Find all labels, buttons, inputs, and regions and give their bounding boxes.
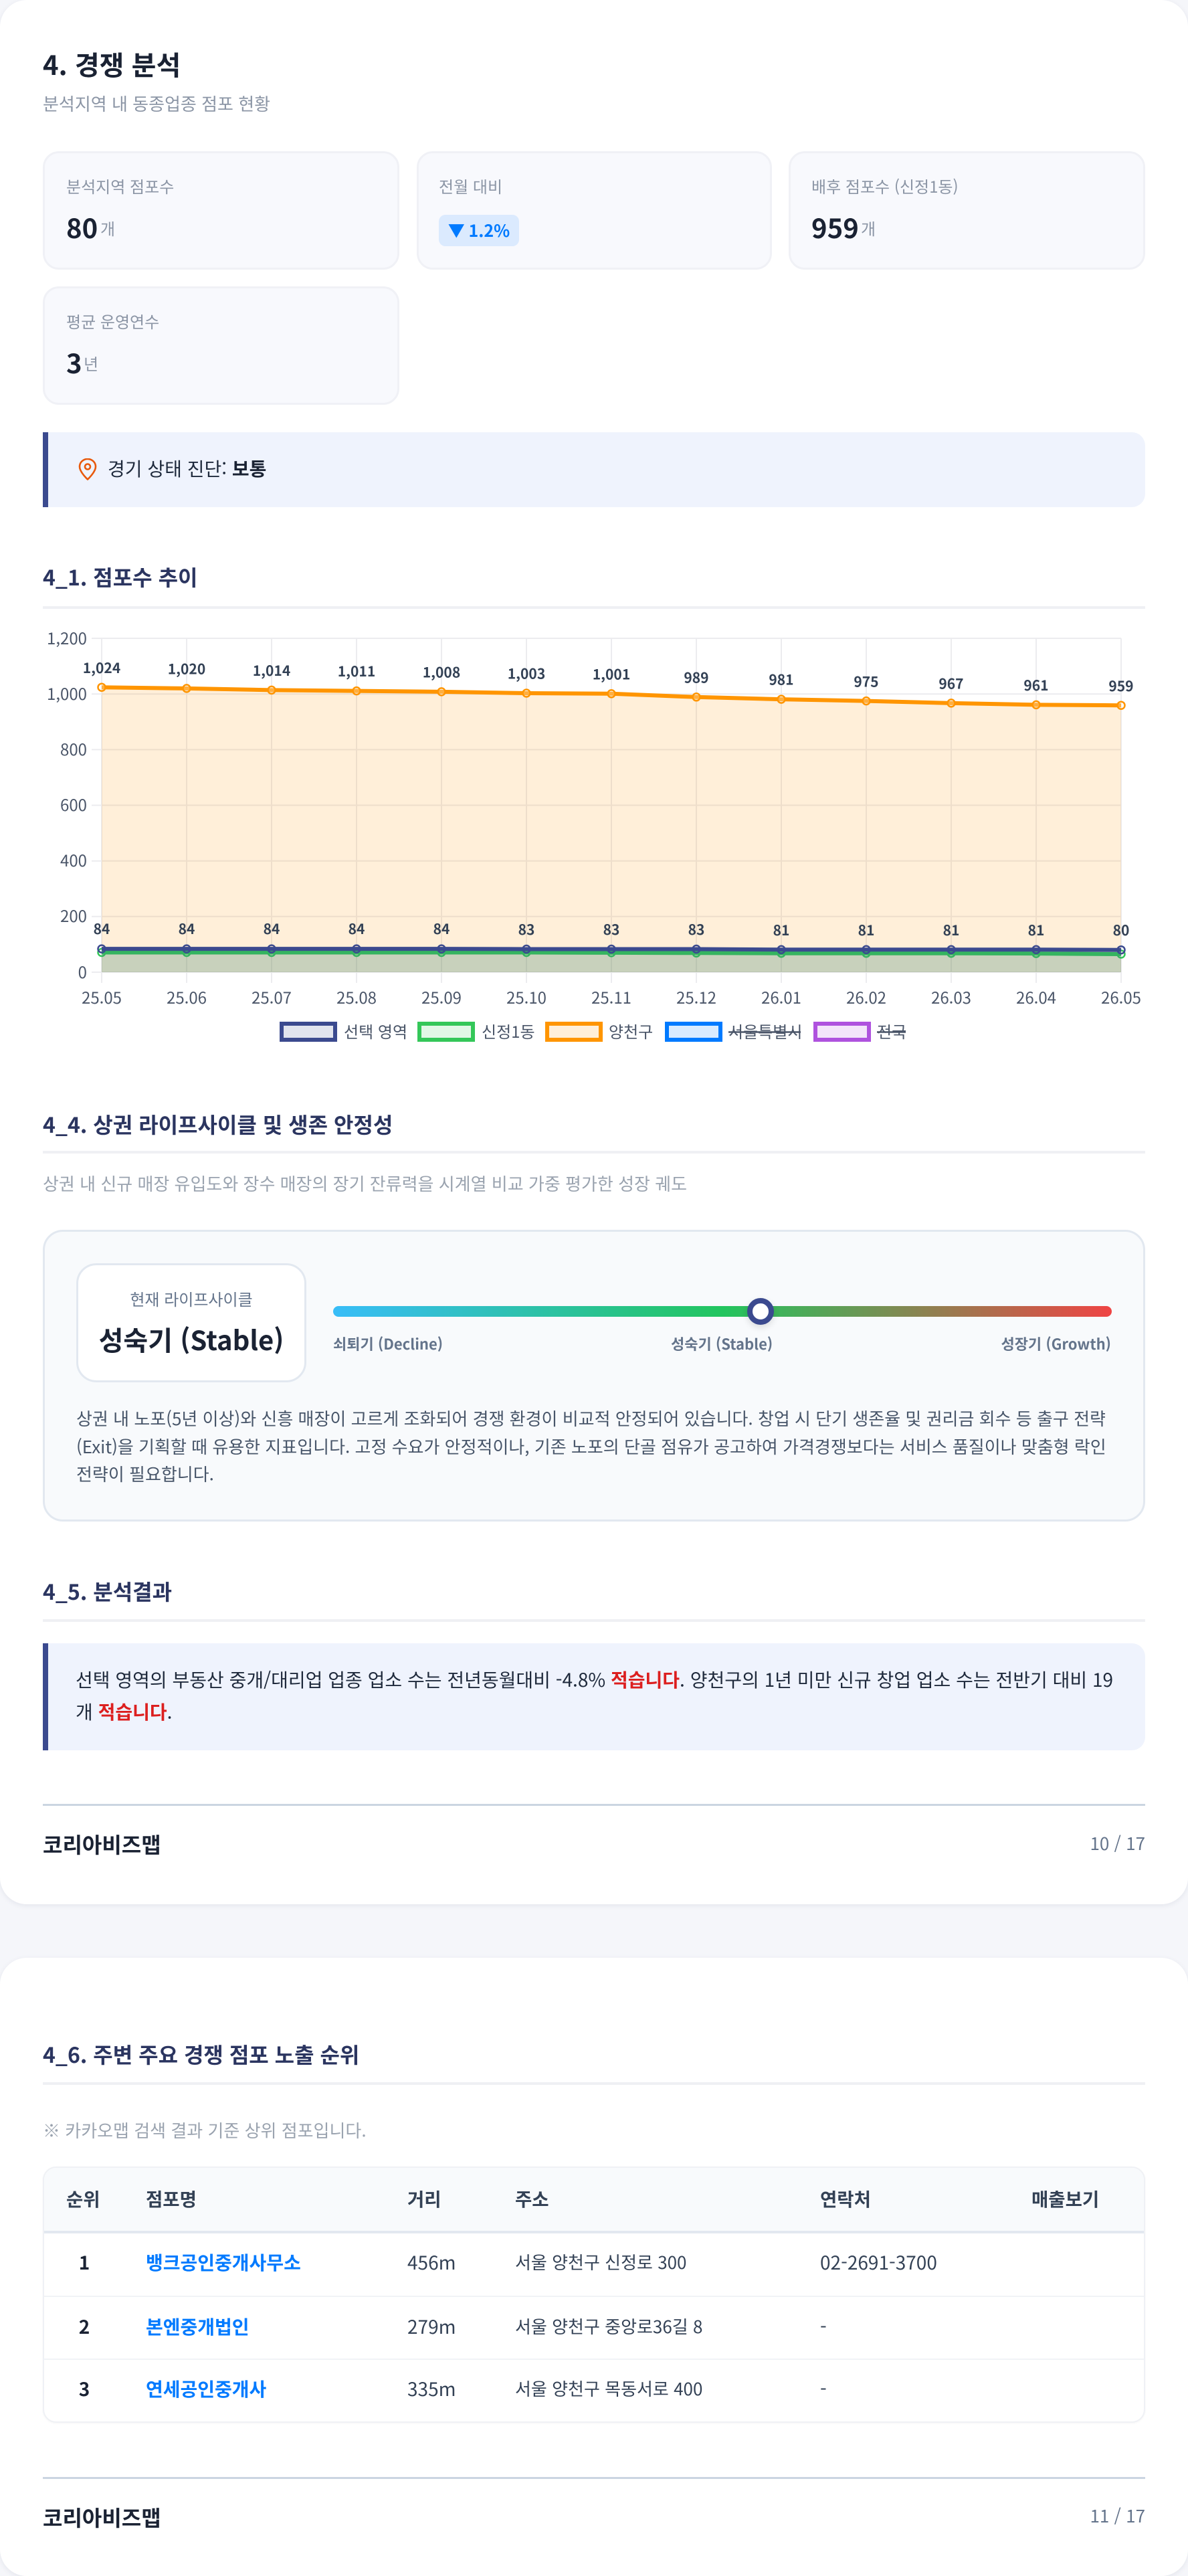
card label: 평균 운영연수 [66, 309, 159, 333]
row 2 [44, 2297, 1144, 2360]
legend: 전국 [877, 1019, 906, 1042]
x axis labels: 26.01 [761, 985, 801, 1008]
data labels: Yangcheon-gu: 975 [854, 672, 879, 692]
data labels: selected area: 80 [1113, 920, 1129, 940]
data labels: Yangcheon-gu: 1,020 [168, 658, 205, 678]
y axis labels: 1,000 [47, 681, 87, 705]
x axis labels: 26.03 [931, 985, 971, 1008]
series: Sinjeong 1-dong area and line [98, 949, 1125, 972]
y axis labels: 600 [60, 792, 87, 816]
data labels: Yangcheon-gu: 1,003 [508, 664, 545, 684]
x axis labels: 25.09 [421, 985, 462, 1008]
heading: 4_4: 4_4. 상권 라이프사이클 및 생존 안정성 [43, 1109, 393, 1139]
y axis labels [47, 626, 87, 983]
contact: 02-2691-3700 [820, 2249, 937, 2276]
x axis labels: 26.04 [1016, 985, 1056, 1008]
data labels: Yangcheon-gu: 959 [1108, 676, 1134, 696]
stage label: decline: 쇠퇴기 (Decline) [333, 1333, 443, 1354]
column: distance: 거리 [407, 2185, 441, 2211]
current lifecycle box [76, 1263, 306, 1382]
card: average operating years [43, 286, 399, 405]
badge: down 1.2 percent [439, 215, 519, 246]
column: rank: 순위 [66, 2185, 100, 2211]
icon: map pin [79, 458, 96, 480]
card label: 분석지역 점포수 [66, 174, 174, 197]
legend: 신정1동 [482, 1019, 535, 1042]
card value: 3 [66, 343, 82, 381]
y axis labels: 200 [60, 903, 87, 927]
data labels: selected area: 84 [264, 919, 280, 939]
chart grid [92, 638, 1121, 983]
callout: business condition [43, 432, 1145, 507]
box label: 현재 라이프사이클 [130, 1287, 253, 1310]
x axis labels: 25.05 [82, 985, 122, 1008]
footer brand: 코리아비즈맵 [43, 2502, 161, 2533]
lifecycle paragraph: 전략이 필요합니다. [76, 1461, 214, 1486]
x axis labels: 25.11 [591, 985, 631, 1008]
data labels: Yangcheon-gu: 961 [1023, 675, 1049, 695]
y axis labels: 400 [60, 848, 87, 871]
callout text: 경기 상태 진단: 보통 [108, 455, 266, 482]
card: month over month [417, 151, 772, 270]
column: address: 주소 [515, 2185, 549, 2211]
panel: lifecycle [43, 1230, 1145, 1522]
result text: 개 적습니다. [76, 1698, 172, 1725]
data labels: Yangcheon-gu: 1,008 [423, 662, 460, 682]
x axis labels: 25.07 [252, 985, 292, 1008]
x axis labels: 26.05 [1101, 985, 1141, 1008]
store name: 본엔중개법인 [146, 2313, 250, 2340]
heading: 4_5: 4_5. 분석결과 [43, 1576, 172, 1606]
card unit: 개 [861, 216, 876, 240]
x axis labels: 25.10 [506, 985, 547, 1008]
card unit: 년 [84, 351, 98, 375]
data labels: selected area: 83 [603, 919, 619, 939]
data labels: Yangcheon-gu [83, 658, 1134, 696]
data labels: selected area: 84 [94, 919, 110, 939]
badge: down 1.2 percent: ▼ 1.2% [448, 218, 510, 242]
contact: - [820, 2375, 827, 2402]
lifecycle paragraph [76, 1406, 1106, 1486]
rank: 3 [79, 2375, 90, 2402]
data labels: Yangcheon-gu: 989 [684, 668, 709, 688]
lifecycle description: 상권 내 신규 매장 유입도와 장수 매장의 장기 잔류력을 시계열 비교 가중 평가한 성장 궤도 [43, 1171, 687, 1196]
data labels: selected area: 83 [688, 919, 704, 939]
page number: 11 / 17 [1090, 2503, 1145, 2528]
column: name: 점포명 [146, 2185, 197, 2211]
address: 서울 양천구 신정로 300 [515, 2249, 686, 2274]
data labels: Yangcheon-gu: 981 [769, 669, 794, 689]
card label: 전월 대비 [439, 174, 502, 197]
card: store count [43, 151, 399, 270]
data labels: Yangcheon-gu: 967 [938, 673, 964, 693]
data labels: selected area: 84 [433, 919, 450, 939]
lifecycle position marker [747, 1298, 774, 1325]
data labels: selected area: 81 [943, 920, 959, 940]
data labels: Yangcheon-gu: 1,011 [338, 661, 375, 681]
data labels: selected area: 83 [518, 919, 534, 939]
panel: page 11 nearby competitors [0, 1958, 1188, 2576]
distance: 279m [407, 2313, 456, 2340]
result text: 선택 영역의 부동산 중개/대리업 업종 업소 수는 전년동월대비 -4.8% 적습니다. 양천구의 1년 미만 신규 창업 업소 수는 전반기 대비 19 [76, 1666, 1113, 1693]
distance: 335m [407, 2375, 456, 2402]
address: 서울 양천구 목동서로 400 [515, 2376, 702, 2401]
stage label: stable: 성숙기 (Stable) [671, 1333, 773, 1354]
data labels: selected area: 81 [858, 920, 874, 940]
card value: 80 [66, 207, 98, 246]
data labels: selected area [94, 919, 1129, 940]
store name: 뱅크공인중개사무소 [146, 2249, 301, 2276]
legend [282, 1019, 906, 1042]
data labels: Yangcheon-gu: 1,014 [253, 660, 290, 680]
footer brand: 코리아비즈맵 [43, 1829, 161, 1859]
lifecycle paragraph: (Exit)을 기획할 때 유용한 지표입니다. 고정 수요가 안정적이나, 기존 노포의 단골 점유가 공고하여 가격경쟁보다는 서비스 품질이나 맞춤형 락인 [76, 1433, 1106, 1459]
x axis labels: 25.12 [676, 985, 716, 1008]
data labels: selected area: 81 [1028, 920, 1044, 940]
table header [44, 2168, 1144, 2233]
x axis labels: 25.08 [336, 985, 377, 1008]
box value: 성숙기 (Stable) [99, 1319, 284, 1358]
x axis labels [82, 985, 1141, 1008]
heading: 4_6: 4_6. 주변 주요 경쟁 점포 노출 순위 [43, 2039, 359, 2069]
data labels: selected area: 84 [349, 919, 365, 939]
row 1 [44, 2233, 1144, 2297]
address: 서울 양천구 중앙로36길 8 [515, 2314, 702, 2338]
column: sales: 매출보기 [1031, 2185, 1099, 2211]
x axis labels: 26.02 [846, 985, 886, 1008]
line chart: store count trend [47, 626, 1141, 1042]
card value: 959 [811, 207, 859, 246]
legend: 서울특별시 [728, 1019, 802, 1042]
data labels: Yangcheon-gu: 1,001 [593, 664, 630, 684]
rank: 1 [79, 2249, 90, 2276]
card unit: 개 [100, 216, 115, 240]
distance: 456m [407, 2249, 456, 2276]
store name: 연세공인중개사 [146, 2375, 266, 2402]
title: 4. 경쟁 분석 [43, 44, 181, 83]
callout: analysis result [43, 1643, 1145, 1750]
y axis labels: 800 [60, 737, 87, 760]
series: selected area and line [98, 945, 1125, 972]
y axis labels: 1,200 [47, 626, 87, 649]
heading: 4_1: 4_1. 점포수 추이 [43, 561, 197, 592]
result text [76, 1666, 1113, 1725]
data labels: selected area: 81 [773, 920, 789, 940]
stage label: growth: 성장기 (Growth) [1001, 1333, 1111, 1354]
series: Yangcheon-gu area and line [98, 684, 1125, 972]
row 3 [79, 2375, 827, 2402]
column: contact: 연락처 [820, 2185, 871, 2211]
contact: - [820, 2313, 827, 2340]
lifecycle gradient bar [333, 1306, 1112, 1317]
data labels: selected area: 84 [179, 919, 195, 939]
subtitle: 분석지역 내 동종업종 점포 현황 [43, 91, 270, 116]
table note: ※ 카카오맵 검색 결과 기준 상위 점포입니다. [43, 2118, 367, 2142]
card: hinterland store count [789, 151, 1145, 270]
panel: page 10 competition analysis [0, 0, 1188, 1904]
rank: 2 [79, 2313, 90, 2340]
legend: 양천구 [609, 1019, 653, 1042]
legend: 선택 영역 [344, 1019, 407, 1042]
table: competitor ranking [43, 2167, 1145, 2423]
data labels: Yangcheon-gu: 1,024 [83, 658, 120, 678]
y axis labels: 0 [78, 959, 87, 983]
x axis labels: 25.06 [167, 985, 207, 1008]
page number: 10 / 17 [1090, 1831, 1145, 1855]
card label: 배후 점포수 (신정1동) [811, 174, 959, 197]
lifecycle paragraph: 상권 내 노포(5년 이상)와 신흥 매장이 고르게 조화되어 경쟁 환경이 비교적 안정되어 있습니다. 창업 시 단기 생존율 및 권리금 회수 등 출구 전략 [76, 1406, 1106, 1431]
